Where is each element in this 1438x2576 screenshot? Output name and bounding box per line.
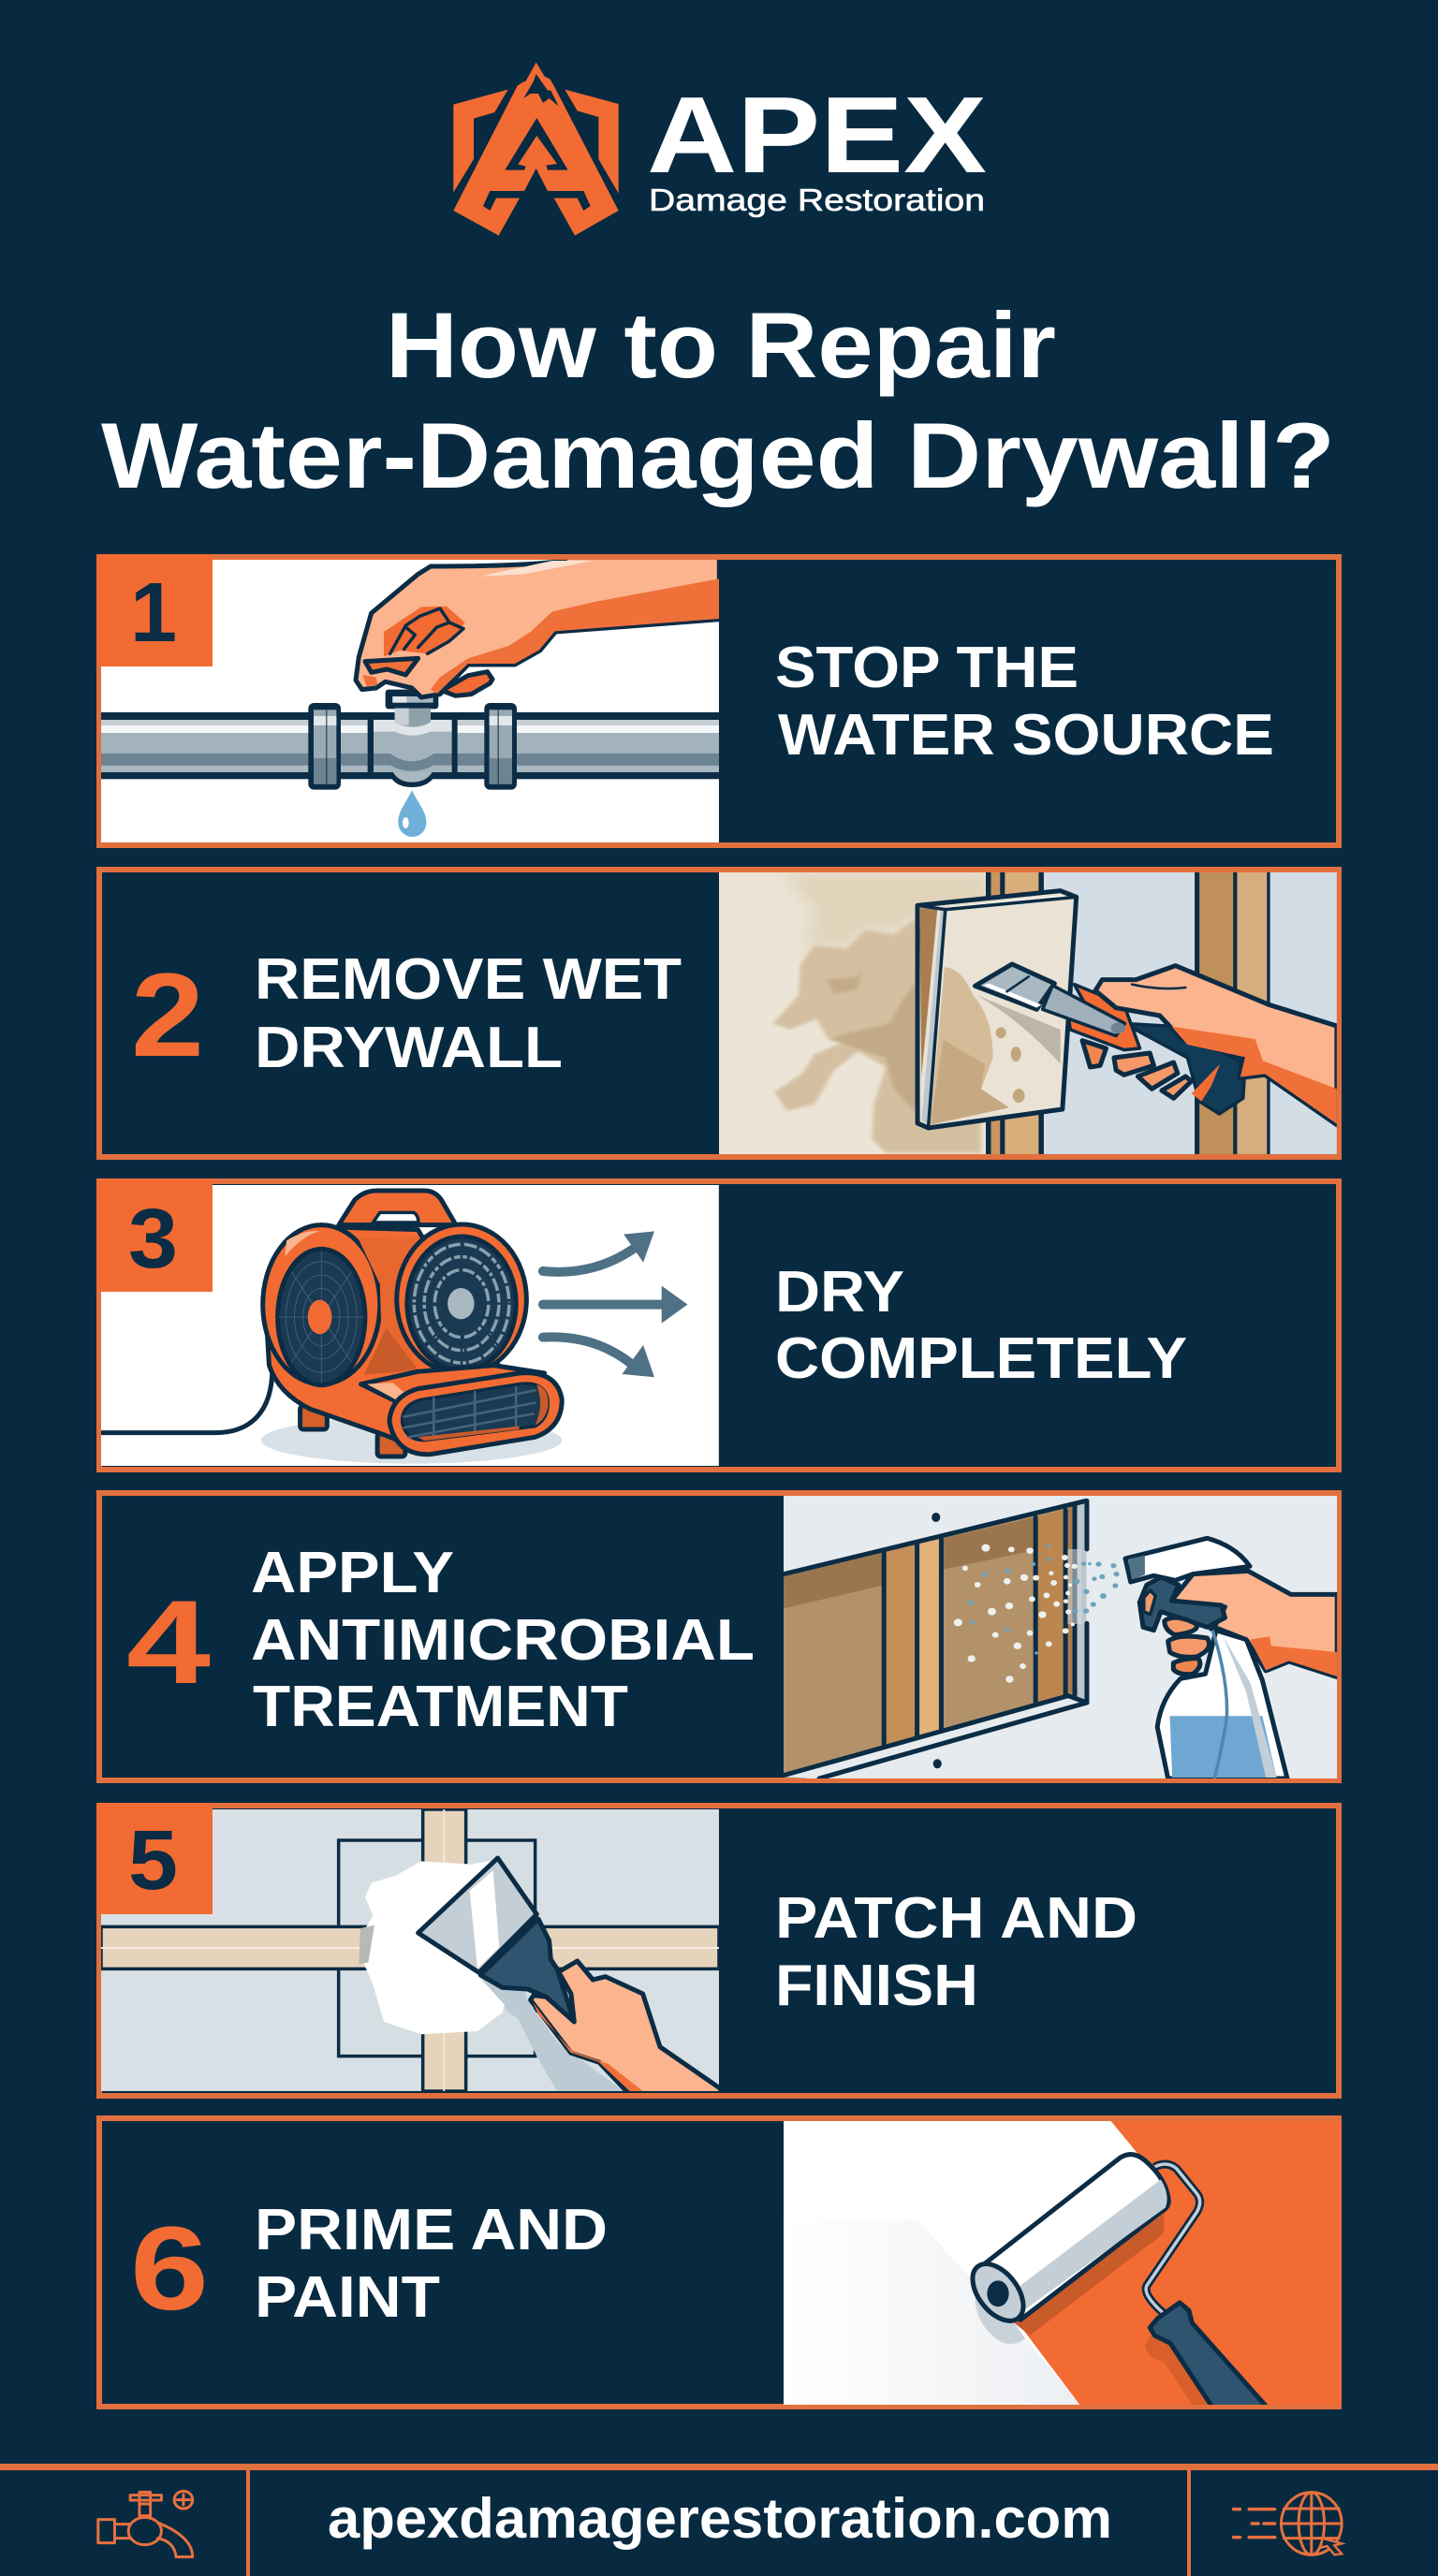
icon: globe with cursor (1234, 2493, 1342, 2554)
panel: step 3 dry completely (96, 1178, 1339, 1470)
step 6 label (255, 2198, 608, 2330)
number 6: 6 (130, 2202, 209, 2334)
website url: apexdamagerestoration.com (328, 2487, 1112, 2550)
step 5 label: FINISH (775, 1954, 978, 2018)
panel: step 5 patch and finish (96, 1803, 1339, 2096)
step 6 label: PAINT (255, 2265, 440, 2330)
illustration: paint roller over orange wall (784, 2121, 1342, 2408)
step 1 label: STOP THE (775, 636, 1078, 700)
panel: step 2 remove wet drywall (99, 870, 1339, 1157)
number 2: 2 (131, 948, 204, 1081)
step 2 label: DRYWALL (255, 1016, 563, 1080)
step 5 label (775, 1886, 1137, 2018)
number 3 badge (96, 1178, 213, 1292)
panel: step 6 prime and paint (99, 2118, 1342, 2408)
tagline: Damage Restoration (649, 183, 985, 218)
number 5 badge (96, 1803, 213, 1914)
title: Water-Damaged Drywall? (101, 403, 1335, 507)
number 5 badge: 5 (128, 1814, 178, 1908)
step 3 label: COMPLETELY (775, 1326, 1187, 1391)
brand name: APEX (647, 74, 987, 196)
step 6 label: PRIME AND (255, 2198, 608, 2262)
panel: step 4 apply antimicrobial treatment (99, 1493, 1339, 1780)
step 1 label: WATER SOURCE (778, 703, 1274, 768)
number 1 badge: 1 (130, 566, 177, 660)
illustration: applying joint compound with putty knife (101, 1809, 721, 2094)
number 4: 4 (126, 1575, 211, 1708)
illustration: hand closing pipe valve (101, 554, 719, 842)
step 4 label: TREATMENT (253, 1675, 628, 1739)
panel: step 1 stop the water source (96, 554, 1339, 845)
illustration: cutting wet drywall with utility knife (719, 872, 1337, 1154)
step 2 label: REMOVE WET (255, 947, 682, 1012)
step 4 label: ANTIMICROBIAL (251, 1608, 755, 1673)
step 3 label: DRY (775, 1260, 904, 1325)
title: How to Repair (386, 293, 1056, 397)
number 1 badge (96, 554, 213, 666)
logo: Apex Damage Restoration (453, 63, 987, 236)
footer bar (0, 2464, 1438, 2576)
step 2 label (255, 947, 682, 1080)
icon: faucet (98, 2491, 193, 2557)
step 1 label (775, 636, 1274, 768)
step 4 label (251, 1541, 755, 1739)
step 3 label (775, 1260, 1187, 1391)
number 3 badge: 3 (128, 1193, 178, 1286)
illustration: spraying antimicrobial on exposed studs (784, 1496, 1337, 1778)
step 5 label: PATCH AND (775, 1886, 1137, 1951)
illustration: air mover fan with airflow arrows (101, 1185, 719, 1466)
logo emblem (453, 63, 619, 236)
step 4 label: APPLY (251, 1541, 454, 1605)
title (101, 293, 1335, 507)
